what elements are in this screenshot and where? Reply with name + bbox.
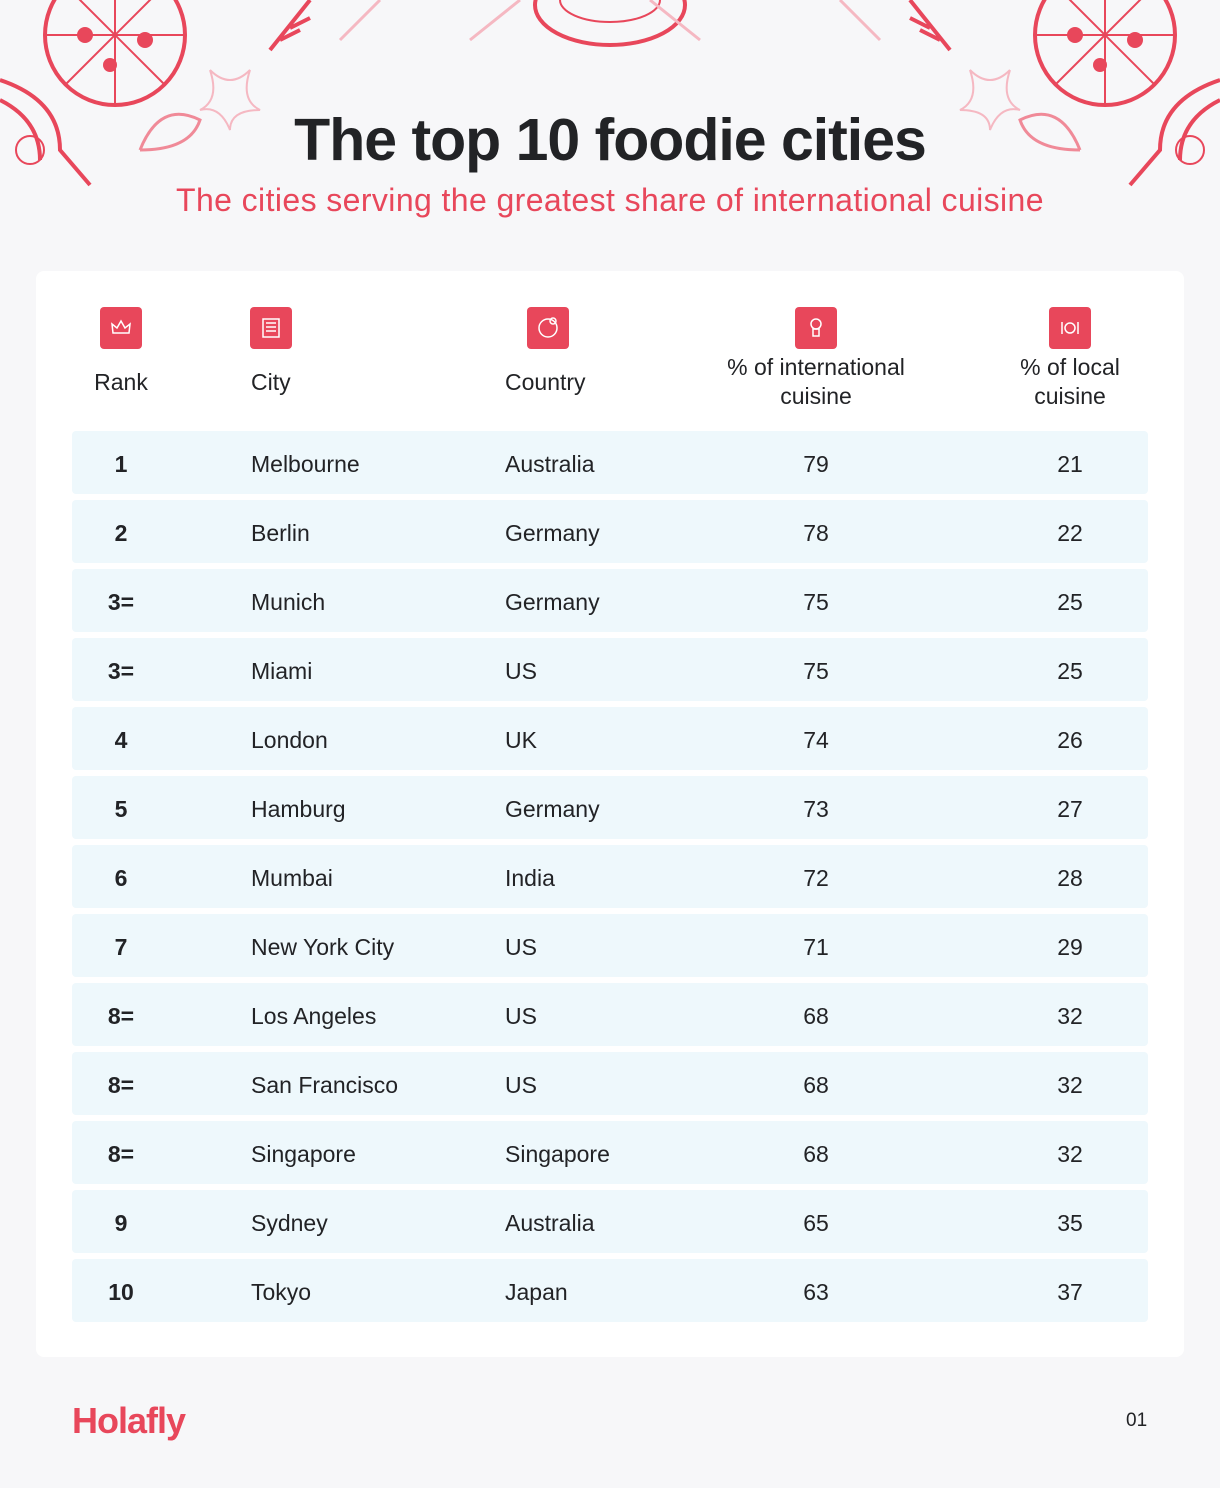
rows: Hamburg: [251, 796, 346, 822]
rows: 35: [1057, 1210, 1083, 1236]
rows: Mumbai: [251, 865, 333, 891]
rows: 37: [1057, 1279, 1083, 1305]
rows: India: [505, 865, 555, 891]
rows: Singapore: [251, 1141, 356, 1167]
rows: 75: [803, 589, 829, 615]
header: country: Country: [505, 369, 586, 395]
rows: 68: [803, 1141, 829, 1167]
rows: US: [505, 658, 537, 684]
header: local: % of local: [1020, 354, 1120, 380]
rows: US: [505, 1072, 537, 1098]
rows: Germany: [505, 520, 600, 546]
rows: 3=: [108, 658, 134, 684]
rows: 79: [803, 451, 829, 477]
panel: table: [36, 271, 1184, 1357]
header: rank: Rank: [94, 369, 148, 395]
rows: 78: [803, 520, 829, 546]
header: international: cuisine: [780, 383, 852, 409]
rows: 7: [115, 934, 127, 960]
rows: Berlin: [251, 520, 310, 546]
icon: globe: [527, 307, 569, 349]
rows: 25: [1057, 658, 1083, 684]
rows: 68: [803, 1003, 829, 1029]
rows: 10: [108, 1279, 134, 1305]
rows: 9: [115, 1210, 127, 1236]
rows: 74: [803, 727, 829, 753]
page number: 01: [1126, 1410, 1147, 1431]
rows: Australia: [505, 1210, 594, 1236]
rows: Melbourne: [251, 451, 360, 477]
header: local: [1020, 354, 1120, 409]
rows: Singapore: [505, 1141, 610, 1167]
header: international: % of international: [727, 354, 905, 380]
rows: UK: [505, 727, 537, 753]
rows: 1: [115, 451, 127, 477]
header: international: [727, 354, 905, 409]
title: The top 10 foodie cities: [294, 107, 926, 173]
header: city: City: [251, 369, 291, 395]
icon: crown: [100, 307, 142, 349]
rows: 21: [1057, 451, 1083, 477]
icon: plate: [1049, 307, 1091, 349]
rows: 25: [1057, 589, 1083, 615]
rows: US: [505, 934, 537, 960]
rows: London: [251, 727, 328, 753]
header: local: cuisine: [1034, 383, 1106, 409]
rows: 8=: [108, 1003, 134, 1029]
rows: 6: [115, 865, 127, 891]
rows: 2: [115, 520, 127, 546]
rows: Germany: [505, 796, 600, 822]
rows: New York City: [251, 934, 394, 960]
icon: chef hat: [795, 307, 837, 349]
rows: San Francisco: [251, 1072, 398, 1098]
rows: US: [505, 1003, 537, 1029]
rows: Munich: [251, 589, 325, 615]
rows: Sydney: [251, 1210, 328, 1236]
rows: 71: [803, 934, 829, 960]
rows: 32: [1057, 1003, 1083, 1029]
rows: 26: [1057, 727, 1083, 753]
rows: Germany: [505, 589, 600, 615]
rows: 32: [1057, 1141, 1083, 1167]
icon: building: [250, 307, 292, 349]
rows: 68: [803, 1072, 829, 1098]
rows: Miami: [251, 658, 312, 684]
rows: 73: [803, 796, 829, 822]
rows: 75: [803, 658, 829, 684]
rows: 29: [1057, 934, 1083, 960]
rows: Japan: [505, 1279, 568, 1305]
rows: 63: [803, 1279, 829, 1305]
rows: 22: [1057, 520, 1083, 546]
rows: 5: [115, 796, 127, 822]
rows: 28: [1057, 865, 1083, 891]
rows: Tokyo: [251, 1279, 311, 1305]
rows: 8=: [108, 1141, 134, 1167]
rows: 8=: [108, 1072, 134, 1098]
rows: 27: [1057, 796, 1083, 822]
rows: [72, 431, 1148, 1322]
rows: 65: [803, 1210, 829, 1236]
decoration: food illustrations: [0, 0, 1220, 186]
rows: 4: [115, 727, 127, 753]
logo: Holafly: [72, 1400, 185, 1441]
rows: 72: [803, 865, 829, 891]
rows: Los Angeles: [251, 1003, 376, 1029]
rows: Australia: [505, 451, 594, 477]
rows: 32: [1057, 1072, 1083, 1098]
subtitle: The cities serving the greatest share of international cuisine: [176, 182, 1044, 218]
rows: 3=: [108, 589, 134, 615]
